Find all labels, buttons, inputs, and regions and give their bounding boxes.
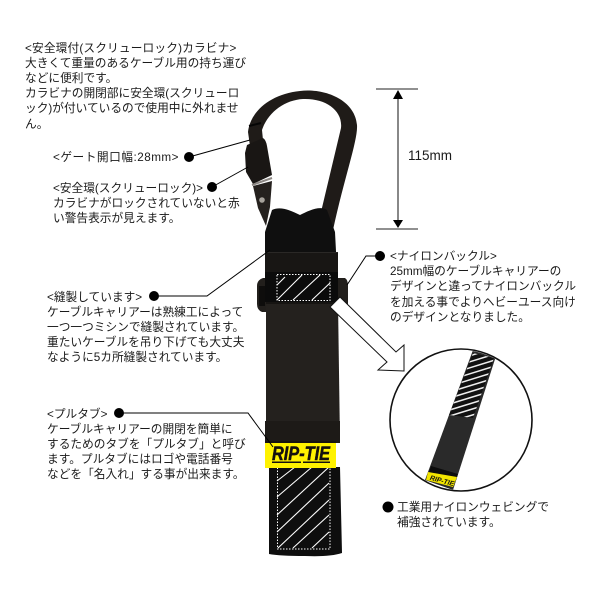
product diagram: [114, 88, 533, 556]
dimension: 115mm: [376, 89, 418, 229]
text: pull tab: [47, 408, 246, 481]
text: nylon buckle: [390, 250, 576, 324]
text: carabiner description: 大きくて重量のあるケーブル用の持ち運び: [25, 57, 246, 70]
stitched hatch panel: pull tab: [277, 467, 330, 549]
strap top loop: [265, 208, 338, 290]
text: height dimension: 115mm: [408, 148, 452, 163]
text: webbing reinforcement: 補強されています。: [397, 516, 501, 529]
text: webbing reinforcement: 工業用ナイロンウェビングで: [397, 501, 549, 514]
text: stitching: <縫製しています>: [47, 290, 142, 304]
text: screw lock: い警告表示が見えます。: [53, 212, 180, 225]
arrow: zoom pointer: [330, 297, 404, 371]
nylon buckle: [257, 278, 348, 312]
text: carabiner description: [25, 42, 246, 131]
callout circle: webbing detail: [390, 348, 532, 491]
text: stitching: [47, 290, 244, 364]
text: screw lock: <安全環(スクリューロック)>: [53, 182, 203, 194]
text: carabiner description: <安全環付(スクリューロック)カラビナ>: [25, 42, 236, 54]
text: nylon buckle: 25mm幅のケーブルキャリアーの: [390, 265, 561, 278]
text: pull tab: ケーブルキャリアーの開閉を簡単に: [47, 423, 233, 436]
text: stitching: なように5カ所縫製されています。: [47, 351, 227, 364]
text: nylon buckle: <ナイロンバックル>: [390, 250, 497, 263]
logo: RIP-TIE label: [265, 441, 336, 468]
text: pull tab: などを「名入れ」する事が出来ます。: [47, 468, 245, 481]
text: pull tab: するためのタブを「プルタブ」と呼び: [47, 438, 246, 451]
leader lines and dots: [114, 140, 394, 512]
text: pull tab: ます。プルタブにはロゴや電話番号: [47, 453, 233, 466]
text: carabiner description: ん。: [25, 118, 48, 131]
text: screw lock: カラビナがロックされていないと赤: [53, 197, 240, 210]
text: webbing reinforcement: [397, 500, 549, 529]
text: nylon buckle: のデザインとなりました。: [390, 311, 530, 324]
callout circle: webbing detail: RIP-TIE: [429, 475, 455, 488]
stitched hatch panel: upper: [277, 274, 330, 300]
text: stitching: 一つ一つミシンで縫製されています。: [47, 321, 244, 334]
text: carabiner description: などに便利です。: [25, 72, 117, 85]
text: stitching: ケーブルキャリアーは熟練工によって: [47, 306, 243, 319]
text: nylon buckle: デザインと違ってナイロンバックル: [390, 280, 576, 293]
logo: RIP-TIE label: RIP-TIE: [272, 444, 331, 465]
text: nylon buckle: を加える事でよりヘビーユース向け: [390, 296, 576, 309]
text: gate opening: <ゲート開口幅:28mm>: [53, 151, 179, 164]
strap main body: [265, 272, 342, 556]
text: stitching: 重たいケーブルを吊り下げても大丈夫: [47, 336, 244, 349]
icon: carabiner: [245, 91, 357, 230]
text: pull tab: <プルタブ>: [47, 408, 107, 420]
text: carabiner description: ック)が付いているので使用中に外れませ: [25, 102, 239, 115]
text: carabiner description: カラビナの開閉部に安全環(スクリューロ: [25, 87, 239, 100]
text: screw lock: [53, 182, 240, 225]
